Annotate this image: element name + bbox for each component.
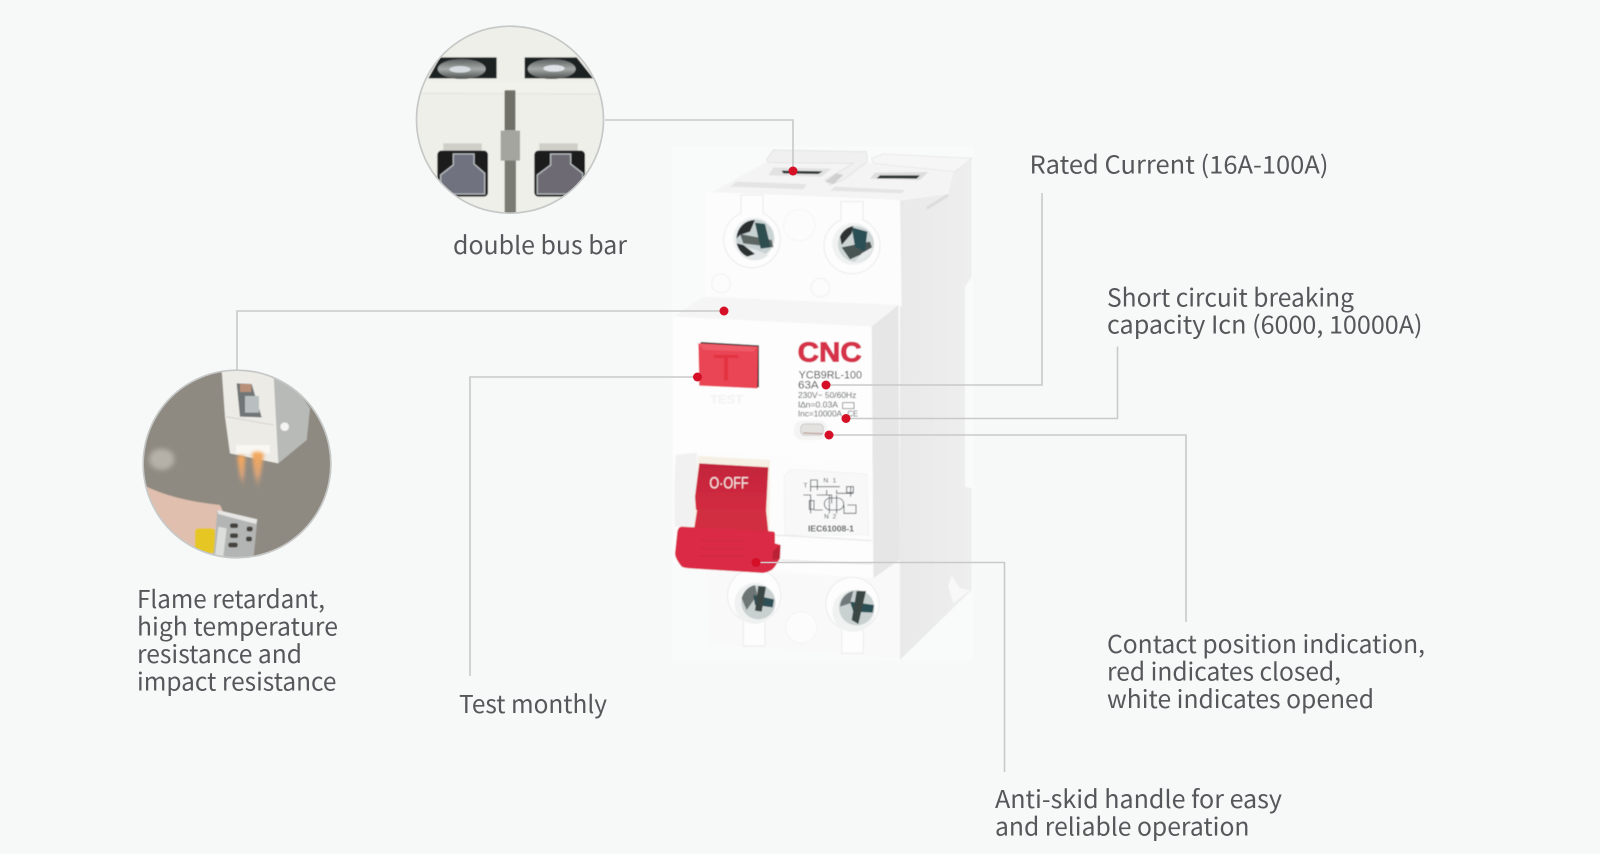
product photo: residual current breaker bbox=[672, 147, 973, 660]
label: short circuit capacity bbox=[1107, 279, 1422, 342]
marker dot: bus bar bbox=[788, 166, 798, 176]
label: test monthly: Test monthly bbox=[459, 686, 607, 721]
marker dot: rated current bbox=[822, 380, 830, 390]
circuit diagram panel: T bbox=[803, 482, 807, 489]
leader line: flame retardant bbox=[237, 311, 724, 372]
circuit diagram panel: N bbox=[824, 514, 829, 521]
inset photo: bus bar detail bbox=[413, 23, 607, 217]
callout: double bus bar bbox=[413, 23, 798, 262]
leader line: test monthly bbox=[470, 377, 698, 676]
marker dot: test button bbox=[693, 372, 702, 382]
callout: rated current bbox=[822, 146, 1328, 390]
circuit diagram panel bbox=[784, 469, 869, 535]
brand and rating text: I∆n=0.03A bbox=[798, 400, 838, 410]
label: rated current: Rated Current (16A-100A) bbox=[1030, 146, 1328, 181]
circuit diagram panel: IEC61008-1 bbox=[808, 523, 854, 533]
upper terminal face bbox=[705, 192, 902, 307]
label: flame retardant: impact resistance bbox=[137, 664, 336, 699]
marker dot: contact position bbox=[824, 430, 834, 440]
callout: anti-skid handle bbox=[752, 558, 1282, 844]
marker dot: short circuit capacity bbox=[842, 414, 850, 423]
test button: T bbox=[713, 347, 739, 389]
brand and rating text: Inc=10000A bbox=[798, 409, 842, 419]
top face with terminal slots bbox=[705, 150, 972, 201]
middle body front bbox=[673, 297, 898, 327]
contact position indicator window bbox=[794, 421, 827, 440]
leader line: bus bar bbox=[605, 120, 793, 171]
label: contact position: red indicates closed, bbox=[1107, 654, 1341, 689]
label: flame retardant: Flame retardant, bbox=[137, 581, 325, 616]
label: short circuit capacity: Short circuit breaking bbox=[1107, 279, 1354, 314]
leader line: rated current bbox=[826, 193, 1042, 385]
lower screw terminals bbox=[727, 569, 879, 653]
marker dot: handle bbox=[752, 558, 760, 567]
circuit diagram panel: 1 bbox=[833, 478, 837, 485]
circuit diagram panel: N bbox=[823, 478, 828, 485]
leader line: short circuit capacity bbox=[846, 346, 1118, 418]
marker dot: flame retardant bbox=[720, 306, 728, 316]
test button bbox=[698, 342, 759, 406]
callout: short circuit capacity bbox=[842, 279, 1422, 423]
right side of breaker bbox=[900, 158, 972, 660]
label: contact position: white indicates opened bbox=[1107, 681, 1374, 716]
red switch lever with O-OFF label bbox=[675, 456, 781, 573]
callout: test monthly bbox=[459, 372, 702, 721]
label: contact position bbox=[1107, 626, 1425, 716]
leader line: contact position bbox=[829, 435, 1186, 622]
callout: contact position indication bbox=[824, 430, 1425, 716]
label: flame retardant: resistance and bbox=[137, 636, 302, 671]
circuit diagram panel: 2 bbox=[833, 514, 837, 521]
switch housing edge bbox=[673, 453, 873, 543]
brand and rating text: CE bbox=[847, 409, 858, 419]
upper screw terminals bbox=[724, 195, 880, 274]
label: flame retardant bbox=[137, 581, 338, 699]
brand and rating text: 63A bbox=[798, 380, 819, 392]
test button: TEST bbox=[710, 392, 744, 406]
brand and rating text: 230V~ 50/60Hz bbox=[798, 390, 856, 400]
label: flame retardant: high temperature bbox=[137, 609, 338, 644]
label: anti-skid handle bbox=[995, 781, 1282, 844]
inset photo: flame test bbox=[140, 367, 337, 563]
red switch lever with O-OFF label: O·OFF bbox=[709, 474, 749, 493]
leader line: anti-skid handle bbox=[756, 562, 1004, 772]
brand and rating text: YCB9RL-100 bbox=[799, 370, 862, 382]
label: short circuit capacity: capacity Icn (6000, 10000A) bbox=[1107, 307, 1422, 342]
brand and rating text bbox=[798, 337, 862, 419]
label: double bus bar: double bus bar bbox=[453, 227, 627, 262]
label: contact position: Contact position indication, bbox=[1107, 626, 1425, 661]
callout: flame retardant bbox=[137, 306, 728, 699]
brand and rating text: CNC bbox=[798, 337, 862, 368]
lower terminal face bbox=[705, 560, 900, 658]
label: anti-skid handle: and reliable operation bbox=[995, 809, 1250, 844]
label: anti-skid handle: Anti-skid handle for easy bbox=[995, 781, 1282, 816]
